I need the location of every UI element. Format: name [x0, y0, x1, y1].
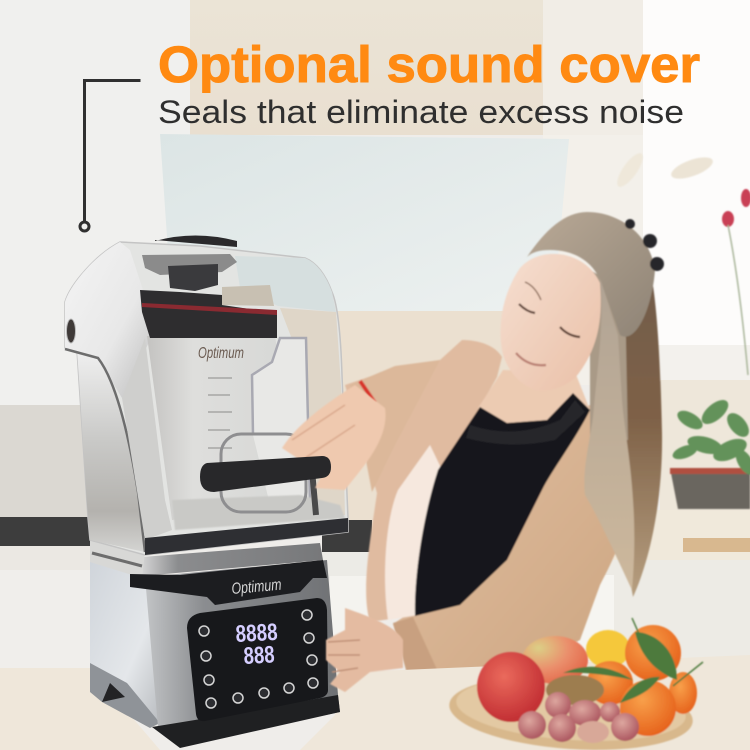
- cardigan right side: [393, 405, 630, 684]
- upper right glass: [235, 256, 336, 312]
- ponytail: [590, 240, 662, 597]
- control panel: [187, 598, 328, 721]
- leaves: [563, 618, 703, 703]
- jar measure marks: [208, 378, 232, 448]
- range hood: [160, 134, 569, 311]
- wooden plate: [447, 669, 695, 750]
- control panel: 888: [243, 641, 275, 670]
- silver cap plate: [142, 254, 237, 275]
- cardigan sleeve band: [393, 617, 440, 684]
- left hand on handle: [282, 385, 386, 490]
- subtitle: Seals that eliminate excess noise: [158, 94, 684, 130]
- base black bottom: [152, 695, 340, 748]
- base collar: [142, 543, 323, 576]
- upper-left white shell: [65, 242, 150, 398]
- jar logo: Optimum: [198, 345, 244, 362]
- hair clip: [625, 219, 664, 271]
- base left face: [90, 555, 164, 725]
- jar foot: [172, 495, 345, 530]
- inner left glass: [122, 338, 172, 540]
- base front: [145, 560, 340, 745]
- callout connector line with dot: [80, 80, 140, 231]
- LED display: 8888: [235, 619, 278, 648]
- chrome arc: [65, 349, 145, 552]
- inner lining: [385, 445, 442, 620]
- loop handle: [221, 434, 306, 512]
- cooktop and counter: [0, 510, 750, 670]
- hair shadow behind face: [590, 270, 628, 440]
- black top: [415, 393, 590, 616]
- cardigan front left: [345, 340, 502, 622]
- lid dark band: [140, 290, 277, 338]
- beaded neckline: [466, 400, 585, 445]
- base lower wedge: [90, 663, 160, 728]
- dark cap: [168, 264, 218, 291]
- black lid top: [155, 236, 237, 247]
- face: [501, 254, 601, 391]
- left body below chrome arc: [77, 350, 145, 552]
- title: Optional sound cover: [158, 36, 700, 93]
- right glass showing wall: [280, 308, 345, 520]
- back arm sleeve: [350, 360, 440, 492]
- dark shell tray: [145, 518, 348, 555]
- base logo band: [130, 560, 327, 605]
- right hand on base: [326, 608, 403, 692]
- woman: [345, 212, 664, 684]
- sound cover: clear shell: [65, 236, 348, 555]
- jar inner jug: [252, 338, 310, 505]
- eyes and mouth: [516, 282, 580, 365]
- lid red line: [142, 303, 277, 315]
- black handle grip: [200, 456, 331, 492]
- fruits: [477, 625, 697, 743]
- base of jar dark stripes: [312, 470, 316, 515]
- bracelet: [360, 381, 375, 403]
- side knob hole: [66, 319, 76, 343]
- base foot notch: [102, 683, 125, 702]
- front hair lock: [584, 278, 634, 590]
- plant decoration: [613, 150, 750, 509]
- jar body: [147, 336, 300, 520]
- panel buttons: [199, 610, 318, 708]
- fruit plate: [447, 618, 703, 750]
- neck: [478, 370, 590, 430]
- logo on base: Optimum: [231, 577, 282, 598]
- table: [0, 655, 750, 750]
- hair top: [527, 212, 655, 337]
- back rim: [90, 540, 145, 578]
- blender: [65, 236, 348, 748]
- lid tan tag: [222, 285, 274, 306]
